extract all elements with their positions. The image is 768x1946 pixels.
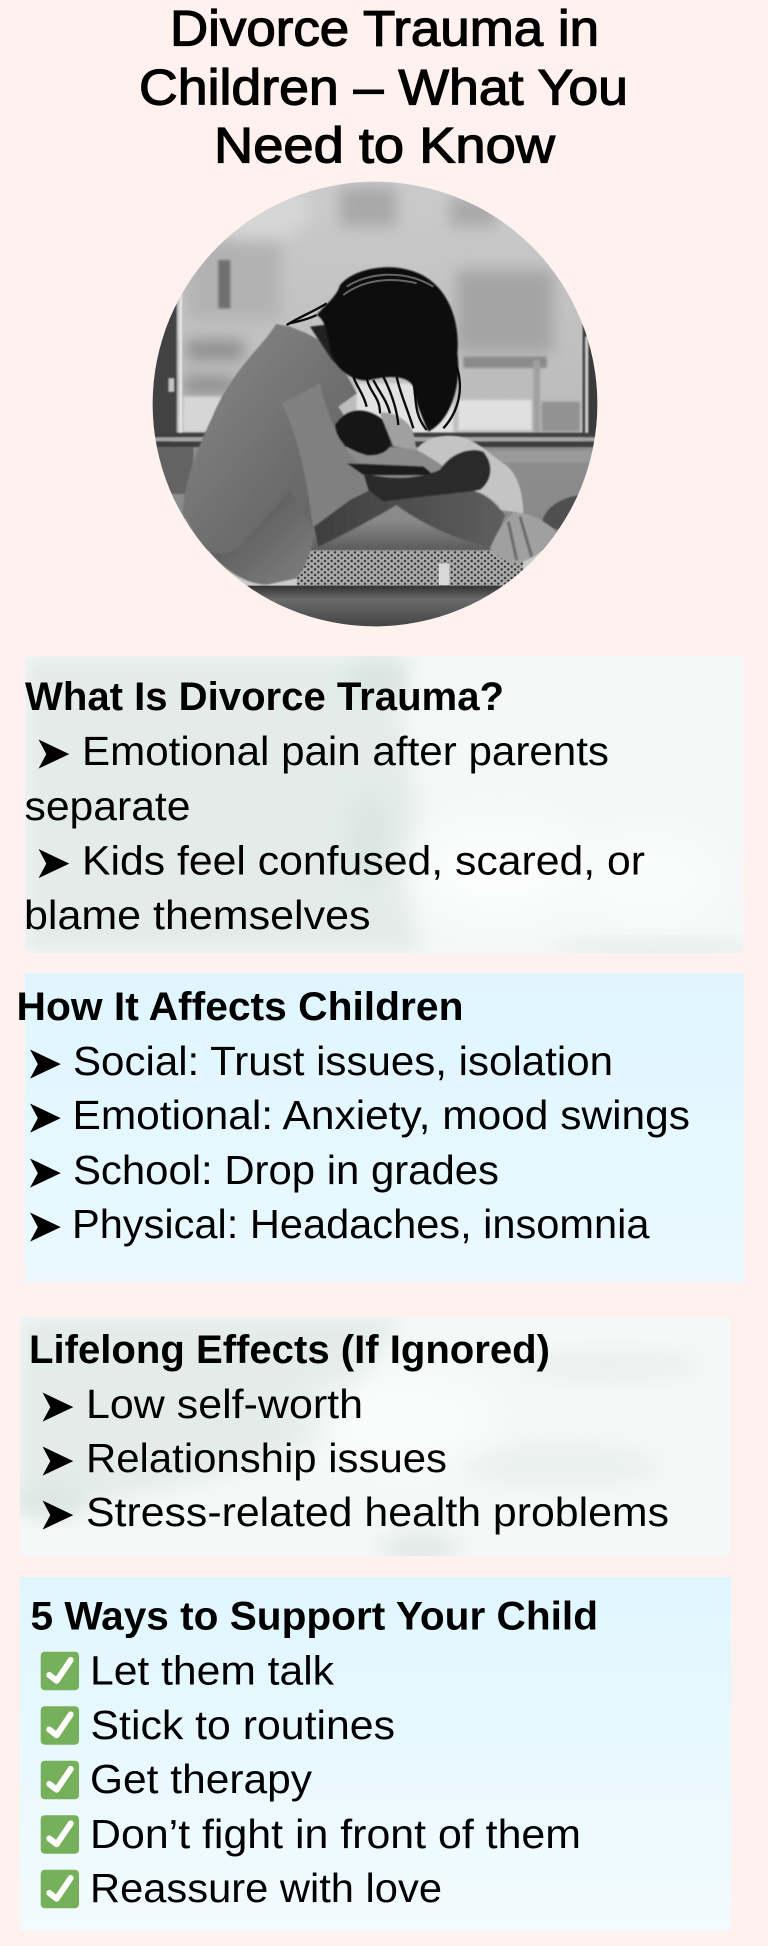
item: school: ➤	[25, 1144, 63, 1198]
panel: lifelong effects	[10, 1317, 730, 1564]
doll body	[417, 436, 523, 513]
bullet one	[24, 726, 609, 829]
bullet two: blame themselves	[24, 892, 371, 938]
sill and wall	[150, 433, 600, 437]
title: Children – What You	[139, 60, 628, 116]
sock	[490, 513, 557, 563]
thigh	[207, 487, 314, 585]
item: social: Social: Trust issues, isolation	[73, 1038, 613, 1084]
heading: What Is Divorce Trauma?	[25, 675, 504, 719]
item: relationship issues: Relationship issues	[86, 1435, 447, 1481]
item: low self-worth: Low self-worth	[86, 1381, 363, 1427]
title	[139, 0, 628, 174]
bullet one: separate	[24, 783, 190, 829]
item: social: ➤	[25, 1036, 63, 1090]
shin and arm	[347, 463, 433, 475]
item: get therapy: Get therapy	[90, 1756, 313, 1802]
item: emotional: ➤	[25, 1090, 63, 1144]
panel: what is divorce trauma	[24, 656, 768, 960]
shirt	[183, 324, 372, 553]
bullet one: Emotional pain after parents	[82, 728, 609, 774]
item: let them talk: Let them talk	[90, 1648, 335, 1694]
title: Divorce Trauma in	[170, 0, 599, 56]
item: stress-related health problems: ➤	[38, 1486, 76, 1540]
heading: Lifelong Effects (If Ignored)	[29, 1328, 550, 1372]
circular photo: child sitting on window sill hugging a doll	[150, 180, 603, 632]
bullet one: ➤	[34, 726, 72, 780]
watercolor background	[25, 656, 768, 960]
item: low self-worth: ➤	[38, 1378, 76, 1432]
bullet two: ➤	[34, 835, 72, 889]
bullet two	[24, 835, 645, 938]
item: physical: Physical: Headaches, insomnia	[72, 1201, 650, 1247]
item: emotional: Emotional: Anxiety, mood swings	[72, 1092, 690, 1138]
title: Need to Know	[214, 118, 556, 174]
left frame	[152, 304, 178, 434]
panel: 5 ways to support your child	[20, 1577, 731, 1930]
item: reassure with love: Reassure with love	[90, 1865, 442, 1911]
right frame	[583, 320, 603, 443]
item: low self-worth	[38, 1378, 363, 1432]
heading: 5 Ways to Support Your Child	[30, 1594, 598, 1638]
item: physical: ➤	[25, 1198, 63, 1252]
panel: how it affects children	[16, 973, 744, 1282]
hair	[287, 267, 460, 432]
watercolor background	[10, 1317, 730, 1564]
doll dark head	[335, 411, 392, 455]
item: school: School: Drop in grades	[73, 1147, 499, 1193]
bullet two: Kids feel confused, scared, or	[82, 838, 645, 884]
item: stress-related health problems: Stress-related health problems	[86, 1489, 669, 1535]
heading: How It Affects Children	[16, 985, 464, 1029]
item: relationship issues: ➤	[38, 1432, 76, 1486]
mat and ledge	[297, 551, 523, 586]
item: don't fight in front of them: Don’t fight in front of them	[90, 1811, 581, 1857]
item: stick to routines: Stick to routines	[90, 1702, 395, 1748]
blue background	[25, 973, 744, 1282]
blue background	[20, 1577, 731, 1930]
neck	[310, 323, 350, 373]
